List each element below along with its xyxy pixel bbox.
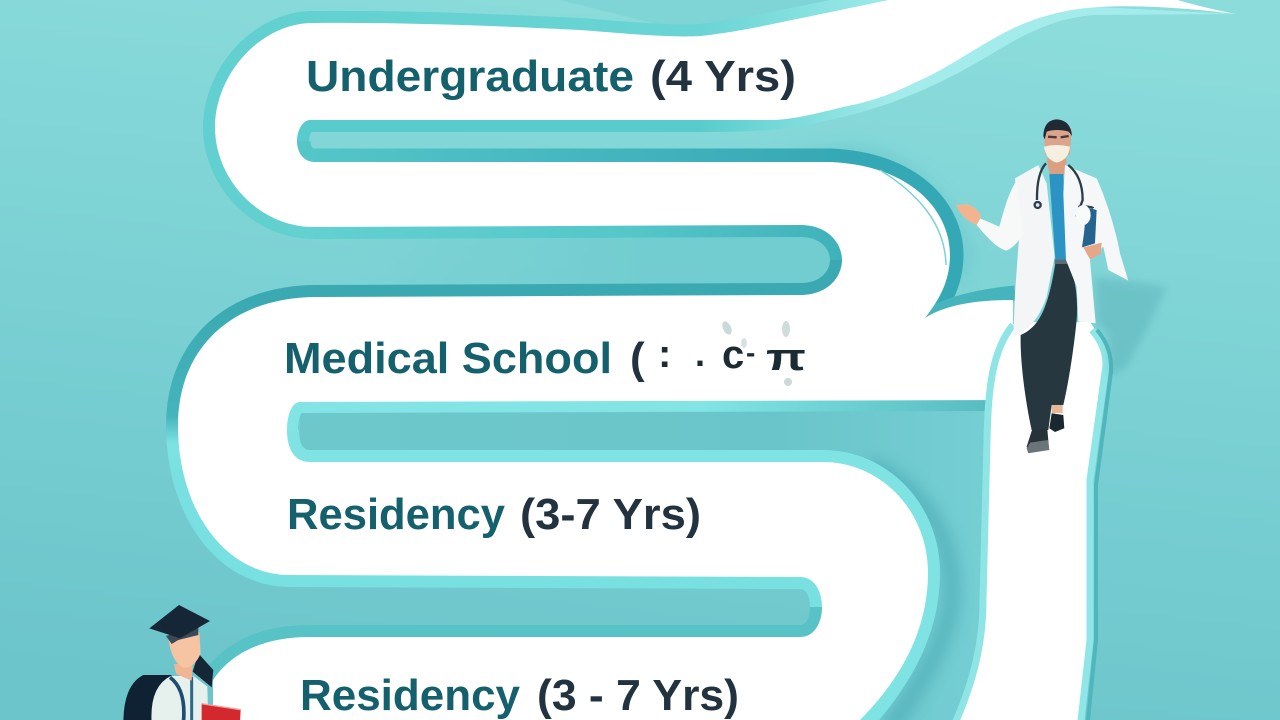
upper soft shadow [780, 142, 975, 290]
ankle [1052, 405, 1063, 413]
neck [174, 664, 193, 681]
heading: medical school: c [722, 333, 744, 377]
channel depth shadow [870, 465, 952, 720]
raised hand [956, 204, 981, 225]
heading: medical school: π [766, 337, 806, 379]
stethoscope [1035, 163, 1093, 217]
heading: medical school: - [746, 337, 755, 368]
head [1044, 128, 1072, 155]
highlight line on curve [880, 170, 946, 265]
heading: medical school: : [658, 332, 671, 376]
road surface [950, 322, 1106, 720]
heading: residency second: Residency [300, 671, 521, 720]
clipboard [1082, 207, 1097, 247]
backpack strap [170, 677, 184, 720]
back shoe [1049, 413, 1064, 432]
top edge band [215, 0, 915, 227]
front shoe [1027, 429, 1049, 453]
heading: medical school [284, 320, 806, 386]
upper band shade [560, 0, 880, 30]
road right edge [1080, 330, 1106, 720]
cap band [166, 626, 198, 644]
belt [1055, 259, 1069, 264]
coat right panel [1063, 165, 1128, 323]
shirt [1049, 174, 1066, 259]
coat left panel [1013, 165, 1055, 337]
second channel upper band [313, 225, 842, 260]
shirt [151, 676, 208, 720]
lower ribbon band [690, 5, 1236, 132]
heading: residency [287, 490, 701, 539]
shaded channel beside the path [300, 398, 990, 720]
lanyard [187, 677, 196, 720]
neck [1047, 158, 1067, 177]
backpack [123, 675, 172, 720]
heading: residency second: (3 - 7 Yrs) [537, 671, 739, 720]
coat fold [1076, 205, 1091, 225]
student figure [123, 605, 241, 720]
third channel lower band [287, 430, 928, 720]
red book [202, 703, 241, 720]
row three corner band [925, 293, 1015, 318]
heading: residency second [300, 671, 739, 720]
long hair [193, 653, 213, 687]
heading: medical school: ( [630, 334, 645, 383]
road left edge [952, 325, 1013, 720]
inner channel fill [350, 235, 835, 285]
heading: residency: Residency [287, 490, 506, 539]
first channel upper band [297, 120, 700, 141]
second channel lower band and arc [178, 260, 842, 607]
heading: undergraduate: Undergraduate [306, 52, 634, 101]
heading: residency: (3-7 Yrs) [520, 490, 701, 539]
holding hand [1083, 243, 1102, 259]
first channel lower band [297, 141, 950, 318]
vertical road [950, 322, 1111, 720]
heading: undergraduate: (4 Yrs) [650, 52, 796, 101]
mortarboard [149, 605, 210, 638]
trousers [1021, 263, 1077, 430]
mask [1044, 145, 1070, 163]
heading: medical school: . [695, 333, 705, 374]
raised sleeve [977, 180, 1023, 251]
face [169, 632, 201, 668]
eyes [1048, 136, 1069, 137]
doctor figure [956, 119, 1167, 453]
road outer edge [1087, 330, 1111, 720]
hair [1043, 119, 1072, 139]
bottom row top band [213, 607, 822, 680]
heading: undergraduate [306, 52, 796, 101]
shoe sole [1027, 440, 1049, 453]
doctor shadow [1095, 277, 1167, 377]
third channel upper band [287, 400, 990, 430]
heading: medical school: Medical School [284, 334, 612, 383]
